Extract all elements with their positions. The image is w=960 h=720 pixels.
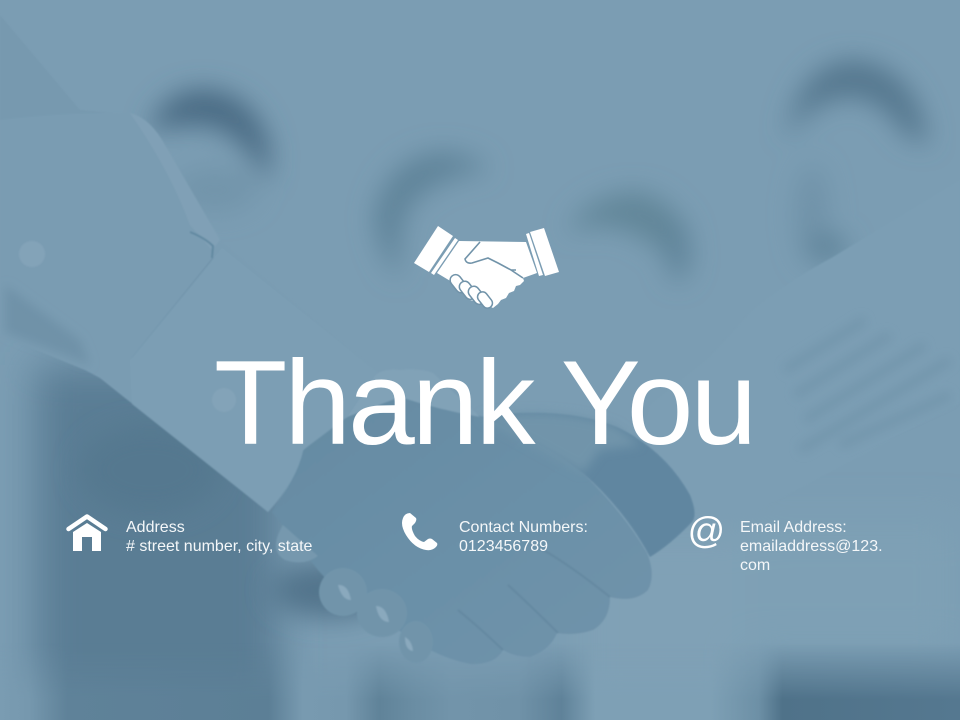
right sleeve: [640, 180, 960, 515]
icon: telephone: [402, 513, 438, 550]
main hand: [272, 390, 652, 664]
text: email address: Email Address:: [740, 519, 847, 536]
icon: at sign: @: [687, 510, 725, 551]
text: address: Address: [126, 519, 185, 536]
text: contact numbers: [459, 519, 588, 555]
hand clasp: [272, 369, 695, 664]
text: contact numbers: Contact Numbers:: [459, 519, 588, 536]
dark shadows: [80, 425, 220, 515]
thumb: [347, 369, 480, 417]
finger lines: [458, 548, 610, 650]
cuff: [130, 248, 377, 512]
left sleeve and cuff: [0, 15, 377, 512]
text: email address: emailaddress@123.: [740, 538, 883, 555]
people: hair and neck shadows: [148, 90, 270, 185]
bottom blurred columns: [58, 653, 960, 720]
icon: house: [66, 514, 108, 551]
title: Thank You: [214, 336, 754, 470]
text: email address: com: [740, 557, 770, 574]
text: email address: [740, 519, 883, 574]
fingertips: [276, 525, 318, 562]
text: address: [126, 519, 312, 555]
text: address: # street number, city, state: [126, 538, 312, 555]
icon: handshake: [414, 226, 559, 308]
text: contact numbers: 0123456789: [459, 538, 548, 555]
sleeve fold shadow: [5, 285, 90, 365]
other hand back: [480, 413, 695, 557]
